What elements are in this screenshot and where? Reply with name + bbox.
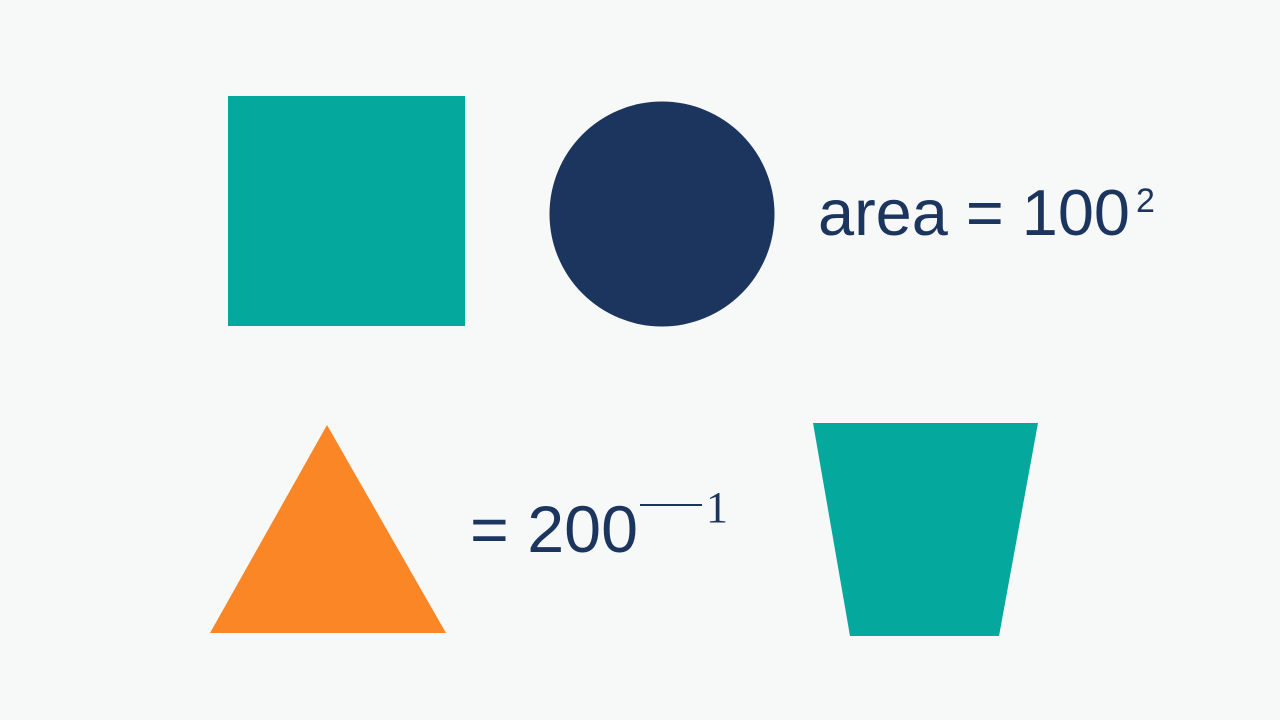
shape: navy circle (550, 102, 774, 326)
shape: orange triangle (210, 425, 446, 633)
text: 200 equation: = 200 (470, 492, 638, 566)
text: area equation: 2 (1136, 182, 1155, 220)
shape: teal trapezoid (813, 423, 1038, 636)
text: 200 equation (470, 483, 728, 566)
text: 200 equation: 1 (706, 483, 728, 532)
shape: teal square (228, 96, 465, 326)
text: area equation: area = 100 (818, 176, 1130, 249)
